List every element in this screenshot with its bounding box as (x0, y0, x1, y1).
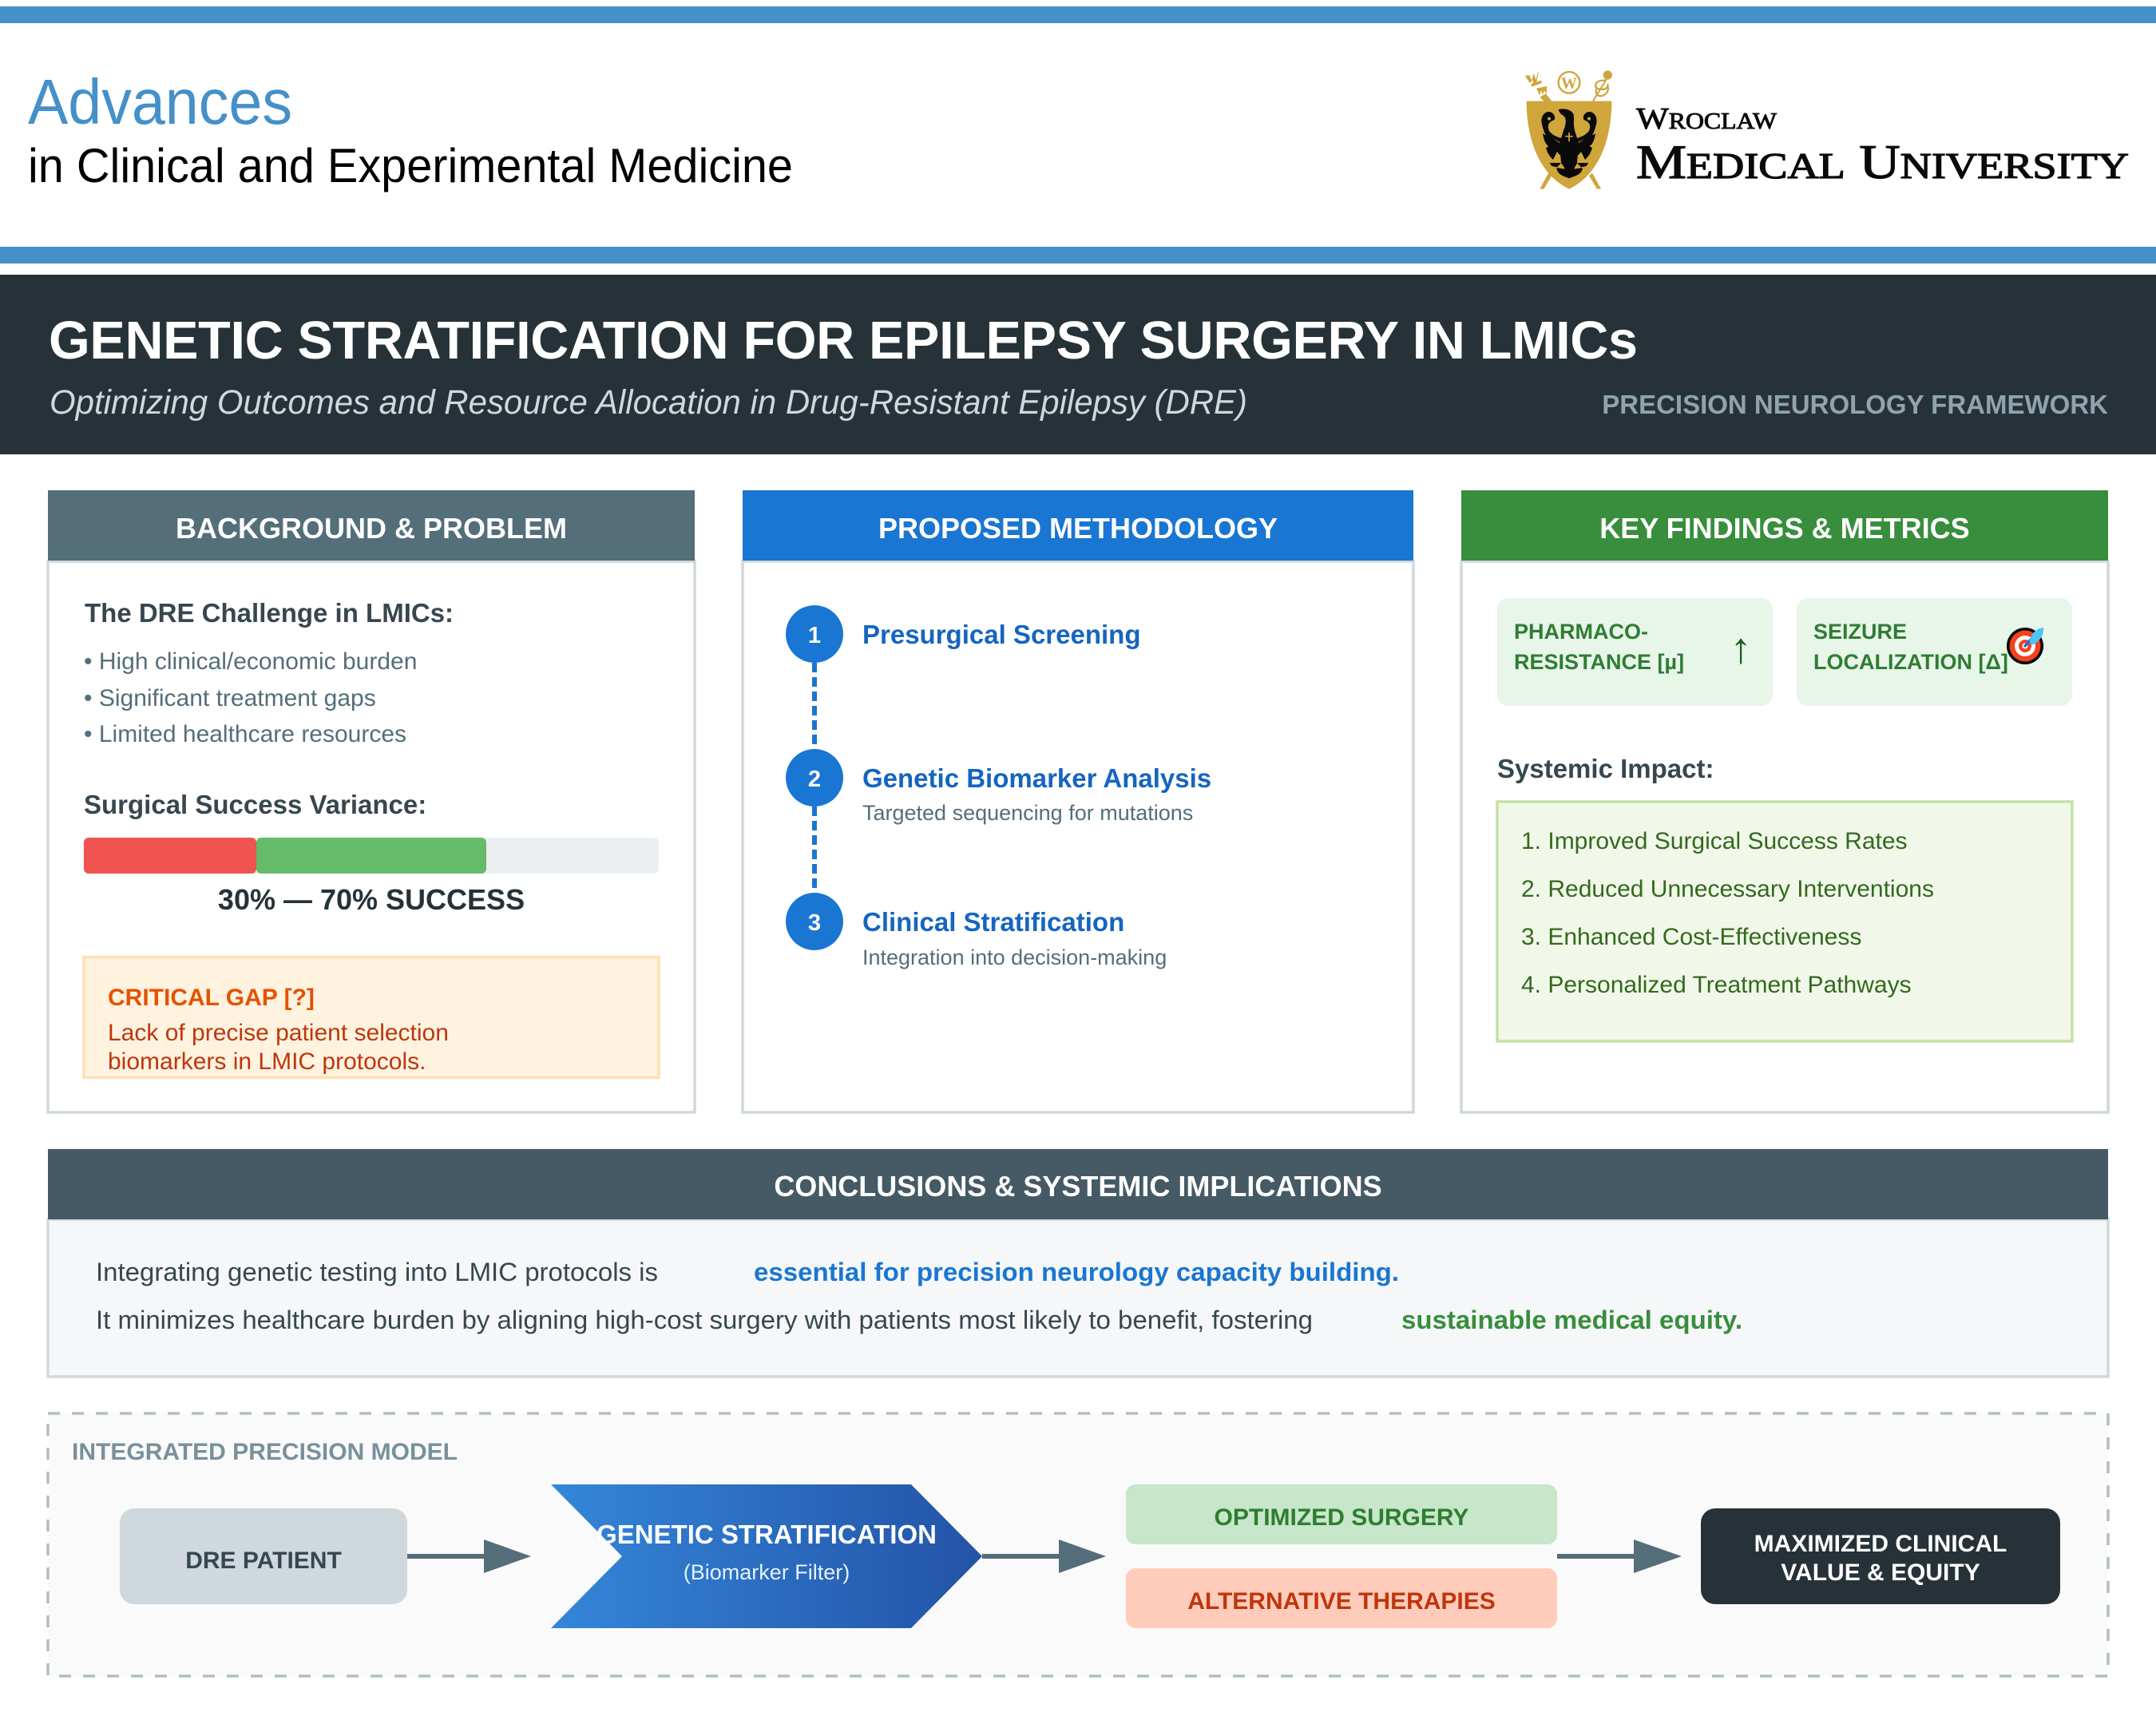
icon: up arrow: ↑ (1730, 624, 1752, 672)
node: genetic stratification: (Biomarker Filter) (684, 1560, 850, 1584)
journal name: subtitle: in Clinical and Experimental Medicine (28, 139, 793, 192)
panel: key findings and metrics (1461, 490, 2108, 1112)
step 1: 1 (808, 623, 821, 648)
node: optimized surgery (1126, 1484, 1557, 1544)
node: maximized clinical value (1701, 1508, 2060, 1604)
stat card: seizure localization: LOCALIZATION [Δ] (1813, 650, 2008, 674)
step 1: Presurgical Screening (862, 620, 1140, 649)
title banner (0, 275, 2156, 454)
panel: integrated precision model (48, 1413, 2108, 1676)
subheading: The DRE Challenge in LMICs: (85, 598, 454, 628)
arrow: outcomes to value (1557, 1540, 1682, 1573)
stat card: pharmacoresistance: RESISTANCE [µ] (1514, 650, 1684, 674)
panel: background and problem (48, 490, 695, 1112)
wordmark: Wroclaw: WROCLAW (1636, 102, 1778, 136)
panel heading: PROPOSED METHODOLOGY (878, 512, 1278, 545)
bullet list: • Significant treatment gaps (84, 685, 376, 711)
step connectors (812, 663, 817, 890)
framework tag: PRECISION NEUROLOGY FRAMEWORK (1602, 390, 2108, 419)
step 1 (786, 605, 1140, 663)
success range bar (84, 838, 659, 874)
arrow: filter to outcomes (982, 1540, 1106, 1573)
panel heading: KEY FINDINGS & METRICS (1599, 512, 1970, 545)
bar caption: 30% — 70% SUCCESS (218, 883, 525, 916)
panel heading: BACKGROUND & PROBLEM (176, 512, 567, 545)
step 3 (786, 893, 1167, 969)
main title: GENETIC STRATIFICATION FOR EPILEPSY SURGERY IN LMICs (49, 311, 1638, 371)
icon: target (2007, 628, 2043, 664)
logo: university crest: W (1561, 75, 1577, 93)
node: genetic stratification (551, 1484, 982, 1628)
impact list: 2. Reduced Unnecessary Interventions (1521, 876, 1934, 902)
logo: university crest (1525, 70, 1612, 189)
arrow: patient to filter (407, 1540, 531, 1573)
impact list: 4. Personalized Treatment Pathways (1521, 972, 1912, 998)
step 2 (786, 749, 1211, 825)
node: alternative therapies (1126, 1568, 1557, 1628)
panel heading: INTEGRATED PRECISION MODEL (72, 1439, 458, 1465)
stat card: pharmacoresistance: PHARMACO- (1514, 620, 1648, 644)
node: DRE patient (120, 1508, 407, 1604)
stat card: seizure localization (1797, 598, 2072, 706)
conclusion line 1 (96, 1258, 1399, 1286)
callout: critical gap: CRITICAL GAP [?] (108, 985, 315, 1011)
node: DRE patient: DRE PATIENT (185, 1548, 342, 1574)
bullet list: • Limited healthcare resources (84, 721, 406, 747)
impact list (1497, 802, 2072, 1041)
subheading: Systemic Impact: (1497, 754, 1714, 783)
conclusion line 1: Integrating genetic testing into LMIC protocols is (96, 1258, 658, 1286)
conclusion line 2: sustainable medical equity. (1401, 1306, 1742, 1334)
stat card: seizure localization: SEIZURE (1813, 620, 1907, 644)
callout: critical gap (84, 957, 659, 1078)
panel: proposed methodology (743, 490, 1413, 1112)
step 2: Targeted sequencing for mutations (862, 801, 1193, 825)
node: optimized surgery: OPTIMIZED SURGERY (1215, 1504, 1468, 1531)
node: maximized clinical value: VALUE & EQUITY (1781, 1559, 1980, 1586)
callout: critical gap: Lack of precise patient selection (108, 1020, 449, 1046)
panel heading: CONCLUSIONS & SYSTEMIC IMPLICATIONS (774, 1170, 1382, 1203)
logo: university name (1636, 102, 2129, 188)
bullet list: • High clinical/economic burden (84, 648, 417, 675)
journal name: Advances: Advances (28, 66, 292, 137)
bullet list (84, 648, 417, 747)
node: alternative therapies: ALTERNATIVE THERAPIES (1187, 1588, 1496, 1615)
callout: critical gap: biomarkers in LMIC protocols. (108, 1048, 426, 1075)
wordmark: Medical University: MEDICAL UNIVERSITY (1636, 136, 2129, 188)
conclusion line 2: It minimizes healthcare burden by aligning high-cost surgery with patients most likely to benefit, fostering (96, 1306, 1313, 1334)
node: genetic stratification: GENETIC STRATIFICATION (596, 1520, 937, 1549)
stat card: pharmacoresistance (1497, 598, 1773, 706)
impact list: 1. Improved Surgical Success Rates (1521, 828, 1908, 854)
step 3: 3 (808, 910, 821, 936)
step 3: Integration into decision-making (862, 945, 1167, 969)
panel: conclusions (48, 1149, 2108, 1377)
step 2: 2 (808, 767, 821, 792)
journal banner (0, 6, 2156, 264)
conclusion line 1: essential for precision neurology capacity building. (754, 1258, 1399, 1286)
node: maximized clinical value: MAXIMIZED CLINICAL (1754, 1531, 2007, 1557)
subtitle: Optimizing Outcomes and Resource Allocation in Drug-Resistant Epilepsy (DRE) (50, 383, 1247, 422)
step 3: Clinical Stratification (862, 907, 1124, 937)
eagle (1541, 109, 1597, 178)
impact list: 3. Enhanced Cost-Effectiveness (1521, 924, 1861, 950)
subheading: Surgical Success Variance: (84, 790, 426, 819)
step 2: Genetic Biomarker Analysis (862, 763, 1211, 793)
